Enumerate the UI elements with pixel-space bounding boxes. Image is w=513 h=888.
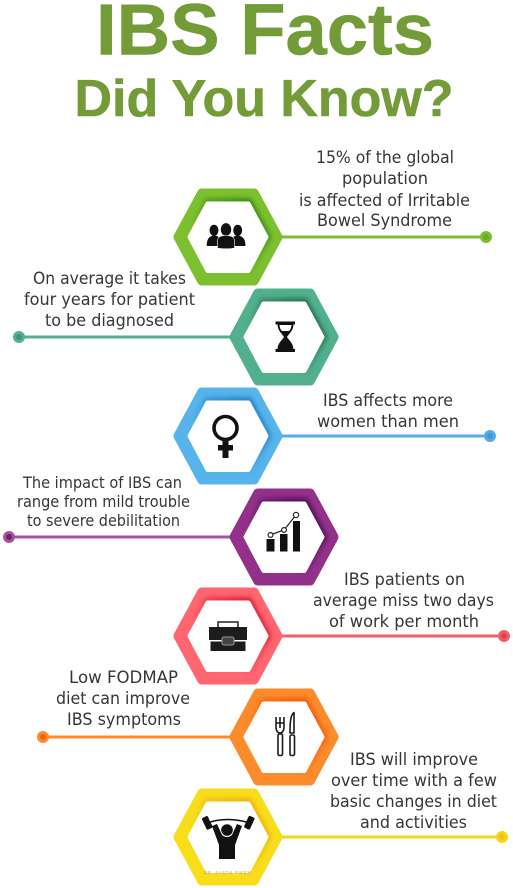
icon: rising bar chart xyxy=(266,512,300,552)
fact 5: missed work xyxy=(178,570,510,680)
fact text: and activities xyxy=(360,813,467,833)
fact text xyxy=(299,148,470,231)
fact 7: diet and activities xyxy=(178,750,508,880)
fact text: 15% of the global xyxy=(316,148,454,168)
fact text: of work per month xyxy=(329,612,479,632)
fact text: The impact of IBS can xyxy=(22,473,182,492)
icon: briefcase xyxy=(209,622,247,651)
fact text: IBS patients on xyxy=(344,570,465,590)
fact text: four years for patient xyxy=(24,290,195,310)
fact 3: women xyxy=(178,391,496,480)
fact text: IBS symptoms xyxy=(67,710,181,730)
fact text: basic changes in diet xyxy=(330,792,497,812)
fact 1: global population xyxy=(178,148,492,280)
fact text xyxy=(24,269,195,331)
fact 2: diagnosis time xyxy=(13,269,334,380)
icon: hourglass xyxy=(276,322,295,352)
fact text xyxy=(317,391,459,432)
fact text xyxy=(17,473,190,530)
icon: weightlifter xyxy=(202,815,255,859)
fact text: IBS will improve xyxy=(350,750,478,770)
fact text: Bowel Syndrome xyxy=(317,211,452,231)
fact text: On average it takes xyxy=(33,269,186,289)
icon: fork and knife xyxy=(276,712,294,756)
fact 4: impact xyxy=(3,473,334,580)
fact text: range from mild trouble xyxy=(17,492,190,511)
fact text: is affected of Irritable xyxy=(299,191,470,211)
fact text: average miss two days xyxy=(313,591,494,611)
fact text: Low FODMAP xyxy=(69,668,178,688)
fact text: women than men xyxy=(317,412,459,432)
fact text: diet can improve xyxy=(56,689,190,709)
fact text: IBS affects more xyxy=(323,391,453,411)
fact 6: FODMAP diet xyxy=(37,668,334,780)
fact text: to severe debilitation xyxy=(27,511,180,530)
icon: group of people xyxy=(207,223,246,249)
fact text: over time with a few xyxy=(331,771,497,791)
fact text xyxy=(313,570,494,632)
watermark: DR. JASON PIKEN xyxy=(204,870,251,875)
fact text: population xyxy=(342,169,428,189)
fact text xyxy=(56,668,190,730)
subtitle: Did You Know? xyxy=(74,70,454,128)
icon: female symbol xyxy=(214,416,237,458)
fact text xyxy=(330,750,497,833)
fact text: to be diagnosed xyxy=(45,311,174,331)
